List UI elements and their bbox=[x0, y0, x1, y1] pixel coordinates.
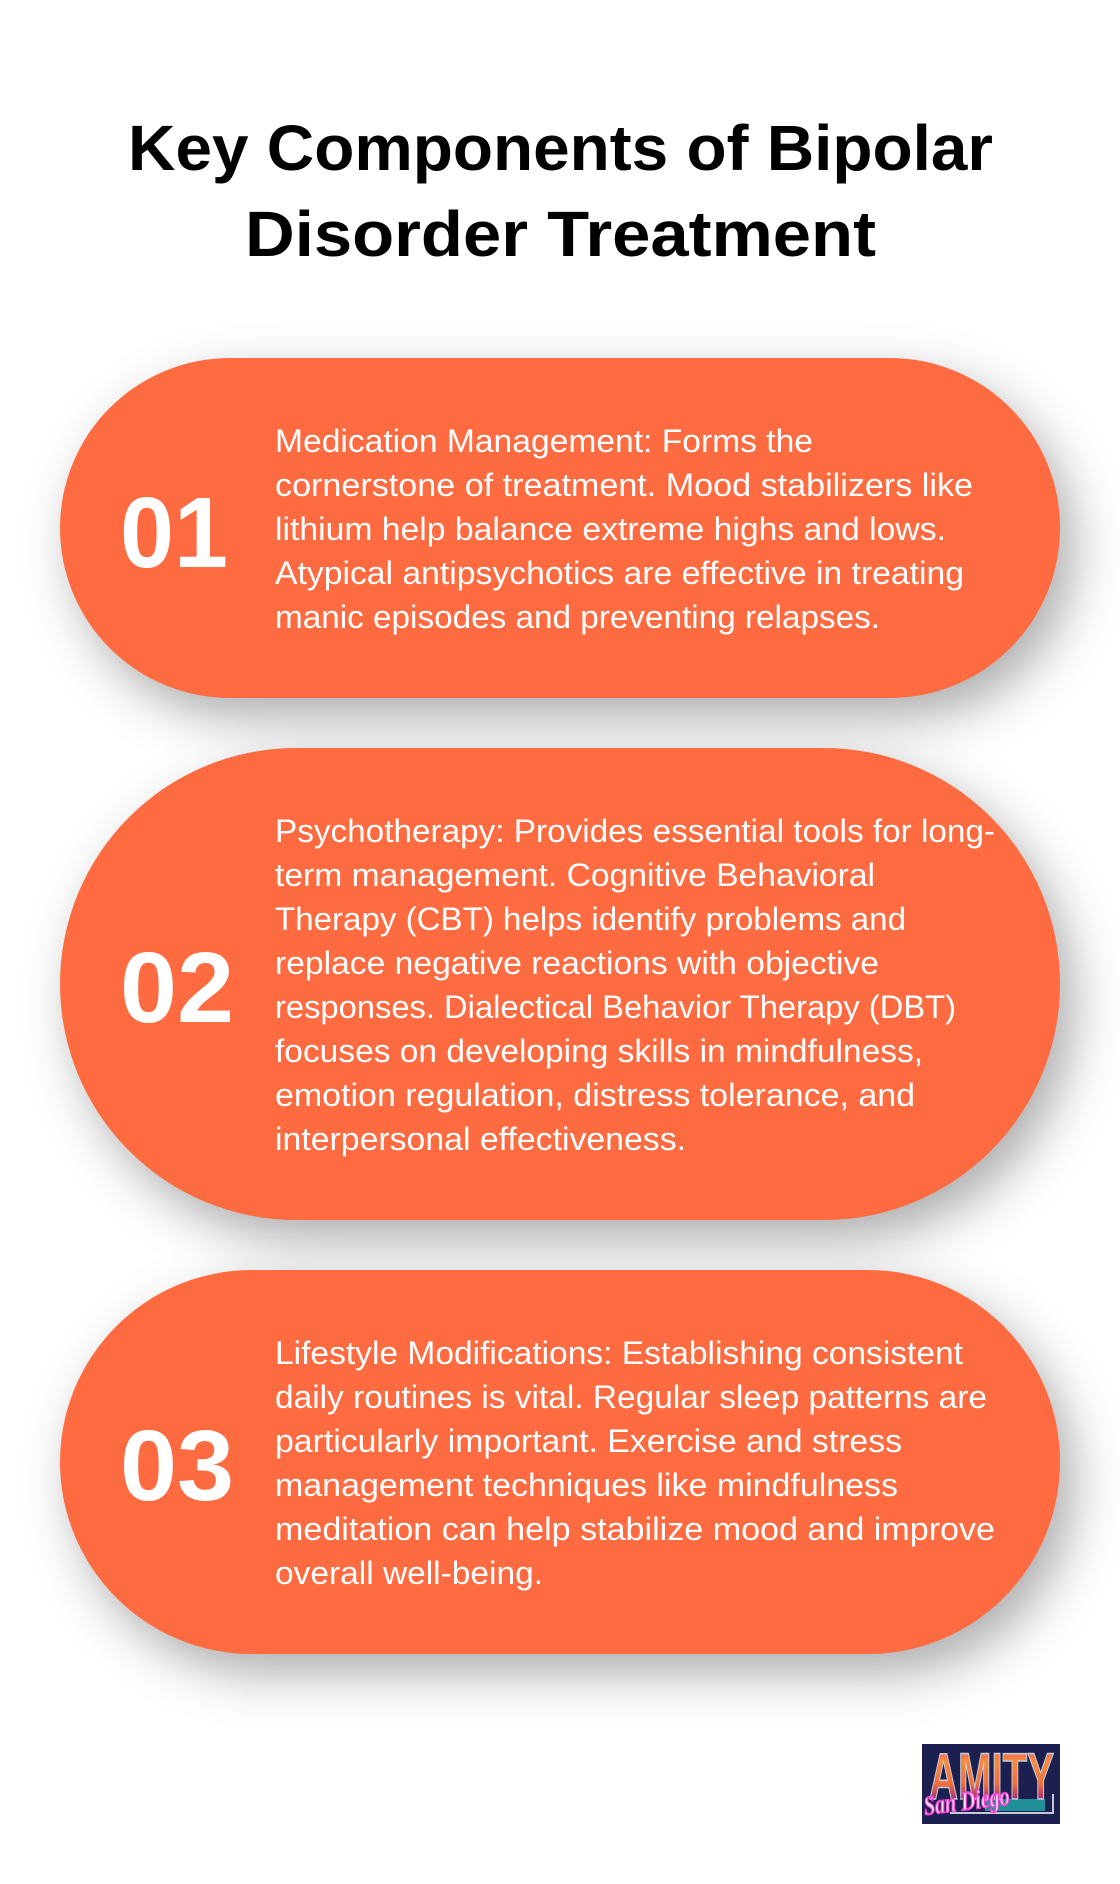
title: Key Components of Bipolar bbox=[128, 112, 993, 184]
text: medication management: manic episodes and preventing relapses. bbox=[275, 599, 880, 635]
text: psychotherapy: emotion regulation, distress tolerance, and bbox=[275, 1077, 915, 1113]
title bbox=[128, 112, 993, 270]
logo: Amity San Diego bbox=[922, 1739, 1060, 1824]
text: lifestyle modifications: overall well-being. bbox=[275, 1555, 543, 1591]
text: psychotherapy bbox=[275, 813, 995, 1157]
text: lifestyle modifications: daily routines is vital. Regular sleep patterns are bbox=[275, 1379, 987, 1415]
text: medication management: cornerstone of treatment. Mood stabilizers like bbox=[275, 467, 973, 503]
panel: medication management bbox=[60, 358, 1060, 698]
text: lifestyle modifications: meditation can help stabilize mood and improve bbox=[275, 1511, 995, 1547]
logo: Amity San Diego: San Diego bbox=[922, 1781, 1011, 1821]
text: psychotherapy: responses. Dialectical Behavior Therapy (DBT) bbox=[275, 989, 956, 1025]
panel: lifestyle modifications bbox=[60, 1270, 1060, 1654]
text: medication management bbox=[275, 423, 973, 635]
text: psychotherapy: focuses on developing skills in mindfulness, bbox=[275, 1033, 923, 1069]
text: lifestyle modifications: particularly important. Exercise and stress bbox=[275, 1423, 902, 1459]
text: medication management: Medication Management: Forms the bbox=[275, 423, 813, 459]
number 03: 03 bbox=[120, 1410, 234, 1522]
text: medication management: lithium help balance extreme highs and lows. bbox=[275, 511, 946, 547]
text: psychotherapy: Psychotherapy: Provides essential tools for long- bbox=[275, 813, 995, 849]
text: lifestyle modifications: Lifestyle Modifications: Establishing consistent bbox=[275, 1335, 963, 1371]
text: psychotherapy: Therapy (CBT) helps identify problems and bbox=[275, 901, 906, 937]
text: lifestyle modifications bbox=[275, 1335, 995, 1591]
text: medication management: Atypical antipsychotics are effective in treating bbox=[275, 555, 964, 591]
number 01: 01 bbox=[120, 477, 228, 589]
text: psychotherapy: replace negative reactions with objective bbox=[275, 945, 879, 981]
text: psychotherapy: interpersonal effectiveness. bbox=[275, 1121, 686, 1157]
text: psychotherapy: term management. Cognitive Behavioral bbox=[275, 857, 875, 893]
number 02: 02 bbox=[120, 932, 234, 1044]
title: Disorder Treatment bbox=[245, 198, 876, 270]
text: lifestyle modifications: management techniques like mindfulness bbox=[275, 1467, 898, 1503]
panel: psychotherapy bbox=[60, 748, 1060, 1220]
